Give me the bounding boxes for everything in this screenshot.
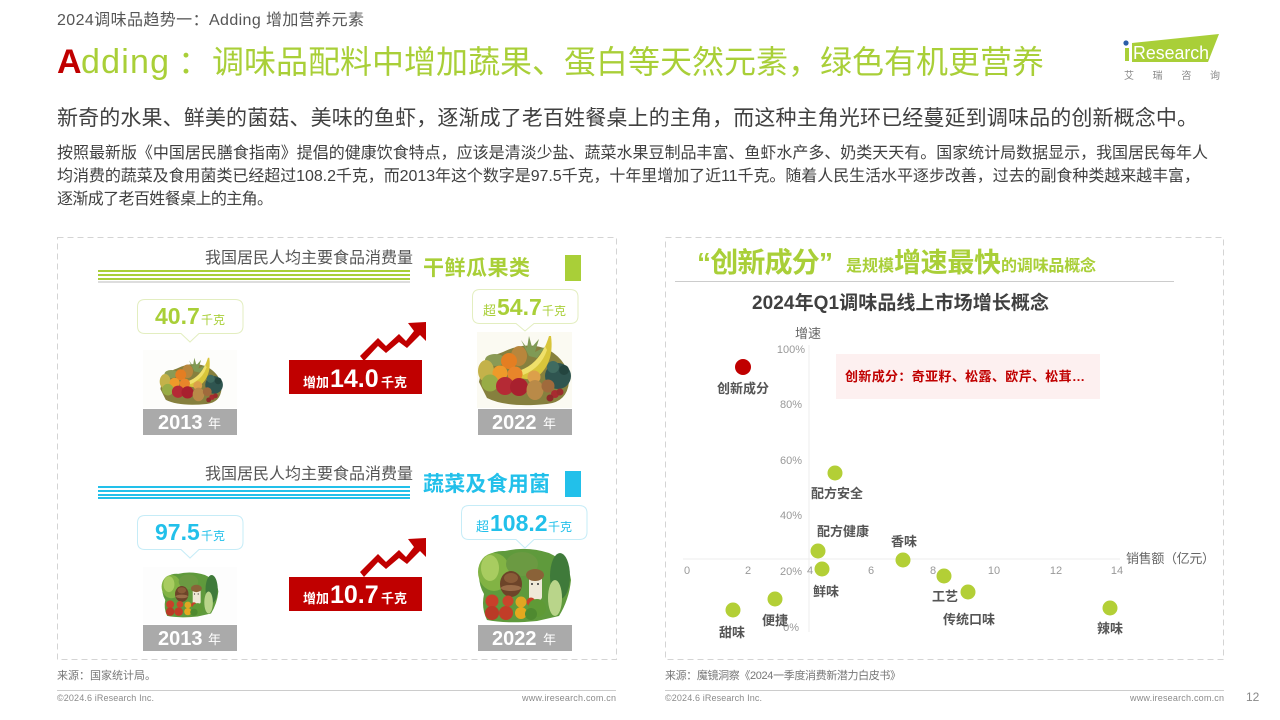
increase badge: [289, 577, 422, 611]
callout 2022 fruit: 54.7: [497, 294, 542, 320]
callout: innovation ingredients: 创新成分：奇亚籽、松露、欧芹、松茸…: [845, 369, 1085, 384]
year 2013: 年: [208, 632, 221, 647]
year 2022: [478, 625, 572, 651]
point: 配方安全: 配方安全: [811, 486, 863, 501]
fruit heading: [98, 249, 581, 283]
vegetable section: [98, 465, 587, 651]
point: 香味: [891, 534, 917, 568]
footer right: [665, 690, 1224, 703]
main title: dding: [81, 43, 169, 81]
point: 配方安全: [811, 466, 863, 501]
panel heading: [675, 247, 1174, 282]
image: fruit 2013: [143, 350, 237, 408]
vegetable heading: [98, 465, 581, 499]
y axis ticks: 0%: [783, 622, 799, 634]
year 2022: 2022: [492, 628, 536, 650]
callout 2013 fruit: 40.7: [155, 303, 200, 329]
body paragraph: 逐渐成了老百姓餐桌上的主角。: [57, 190, 273, 208]
y axis ticks: 100%: [777, 344, 805, 356]
callout 2022 fruit: 千克: [542, 304, 566, 318]
logo: iResearch: Research: [1133, 43, 1209, 63]
point: 创新成分: [717, 359, 769, 396]
main title: A: [57, 43, 82, 81]
panel heading: 的调味品概念: [1001, 256, 1096, 275]
increase badge: 14.0: [330, 365, 379, 393]
point: 便捷: [762, 592, 788, 628]
y axis title: 增速: [795, 326, 821, 341]
x axis ticks: [684, 565, 1123, 577]
chart title: 2024年Q1调味品线上市场增长概念: [752, 291, 1049, 314]
point: 甜味: [719, 602, 745, 640]
vegetable heading: 蔬菜及食用菌: [423, 472, 550, 496]
point: 甜味: 甜味: [719, 625, 745, 640]
year 2022: 年: [543, 416, 556, 431]
x axis ticks: 10: [988, 565, 1000, 577]
point: 辣味: [1097, 600, 1123, 636]
body paragraph: 按照最新版《中国居民膳食指南》提倡的健康饮食特点，应该是清淡少盐、蔬菜水果豆制品丰富、鱼虾水产多、奶类天天有。国家统计局数据显示，我国居民每年人: [57, 143, 1208, 162]
point: 创新成分: 创新成分: [717, 381, 769, 396]
page number: 12: [1246, 690, 1260, 704]
callout 2013 vegetable: 千克: [201, 529, 225, 543]
image: fruit 2022: [477, 332, 572, 408]
point: 鲜味: [813, 562, 839, 599]
increase badge: 增加: [303, 375, 329, 390]
year 2013: 年: [208, 416, 221, 431]
y axis ticks: 60%: [780, 455, 802, 467]
x axis ticks: 8: [930, 565, 936, 577]
y axis ticks: 80%: [780, 399, 802, 411]
vegetable heading: 我国居民人均主要食品消费量: [205, 465, 413, 483]
year 2013: 2013: [158, 628, 202, 650]
point: 便捷: 便捷: [762, 613, 788, 628]
logo: iResearch: [1122, 34, 1220, 82]
increase badge: 千克: [381, 375, 407, 390]
year 2013: [143, 409, 237, 435]
fruit heading: 干鲜瓜果类: [423, 257, 530, 280]
callout 2022 vegetable: 108.2: [490, 510, 548, 536]
body paragraph: [57, 143, 1208, 208]
year 2013: 2013: [158, 412, 202, 434]
point: 辣味: 辣味: [1097, 621, 1123, 636]
lead sentence: 新奇的水果、鲜美的菌菇、美味的鱼虾，逐渐成了老百姓餐桌上的主角，而这种主角光环已经蔓延到调味品的创新概念中。: [57, 107, 1198, 130]
point: 工艺: [932, 568, 958, 604]
source right: 来源：魔镜洞察《2024一季度消费新潜力白皮书》: [665, 668, 901, 682]
point: 工艺: 工艺: [932, 589, 958, 604]
callout 2013 fruit: 千克: [201, 313, 225, 327]
year 2013: [143, 625, 237, 651]
increase badge: 增加: [303, 591, 329, 606]
increase badge: [289, 360, 422, 394]
y axis ticks: [777, 344, 805, 634]
panel: food consumption: [58, 238, 616, 660]
main title: ：: [178, 44, 210, 80]
footer left: ©2024.6 iResearch Inc.: [57, 693, 154, 703]
x axis title: 销售额（亿元）: [1126, 551, 1215, 566]
point: 鲜味: 鲜味: [813, 584, 839, 599]
image: vegetable 2013: [143, 567, 237, 624]
callout 2022 vegetable: [462, 506, 587, 548]
panel: innovation concepts: [666, 238, 1224, 660]
callout 2022 vegetable: 千克: [548, 520, 572, 534]
scatter chart: [683, 326, 1215, 640]
growth arrow: [360, 538, 426, 577]
x axis ticks: 2: [745, 565, 751, 577]
increase badge: 10.7: [330, 581, 379, 609]
callout 2013 vegetable: 97.5: [155, 519, 200, 545]
image: vegetable 2022: [478, 549, 571, 622]
callout 2013 fruit: [138, 300, 243, 342]
footer right: www.iresearch.com.cn: [1129, 693, 1224, 703]
point: 传统口味: [943, 584, 995, 627]
y axis ticks: 20%: [780, 566, 802, 578]
y axis ticks: 40%: [780, 510, 802, 522]
panel heading: 是规模: [846, 257, 894, 275]
main title: 调味品配料中增加蔬果、蛋白等天然元素，绿色有机更营养: [212, 44, 1044, 80]
body paragraph: 均消费的蔬菜及食用菌类已经超过108.2千克，而2013年这个数字是97.5千克，十年里增加了近11千克。随着人民生活水平逐步改善，过去的副食种类越来越丰富，: [57, 167, 1200, 185]
callout 2022 vegetable: 超: [476, 519, 489, 534]
callout 2022 fruit: [472, 290, 578, 331]
x axis ticks: 0: [684, 565, 690, 577]
x axis ticks: 6: [868, 565, 874, 577]
fruit section: [98, 249, 581, 435]
growth arrow: [360, 322, 426, 361]
panel heading: “创新成分”: [697, 247, 833, 278]
x axis ticks: 14: [1111, 565, 1123, 577]
x axis ticks: 4: [807, 565, 813, 577]
panel heading: 增速最快: [894, 248, 1001, 278]
year 2022: 年: [543, 632, 556, 647]
source left: 来源：国家统计局。: [57, 668, 156, 682]
point: 配方健康: 配方健康: [817, 524, 869, 539]
footer right: ©2024.6 iResearch Inc.: [665, 693, 762, 703]
year 2022: [478, 409, 572, 435]
footer left: www.iresearch.com.cn: [521, 693, 616, 703]
section kicker: 2024调味品趋势一：Adding 增加营养元素: [57, 11, 364, 29]
fruit heading: 我国居民人均主要食品消费量: [205, 249, 413, 267]
callout 2022 fruit: 超: [483, 303, 496, 318]
increase badge: 千克: [381, 591, 407, 606]
callout 2013 vegetable: [138, 516, 243, 558]
point: 香味: 香味: [891, 534, 917, 549]
point: 配方健康: [810, 524, 869, 558]
logo: iResearch: 艾瑞咨询: [1124, 69, 1220, 82]
footer left: [57, 690, 616, 703]
point: 传统口味: 传统口味: [943, 612, 995, 627]
x axis ticks: 12: [1050, 565, 1062, 577]
callout: innovation ingredients: [836, 354, 1100, 399]
year 2022: 2022: [492, 412, 536, 434]
